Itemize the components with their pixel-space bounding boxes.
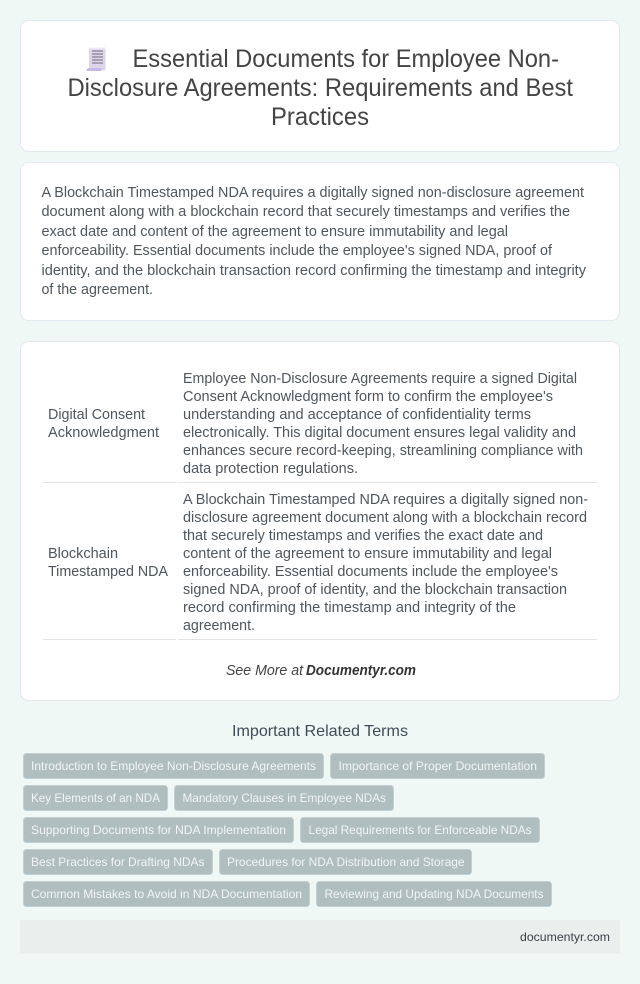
row description: enhances secure record-keeping, streamlining compliance with <box>183 443 583 459</box>
row description: understanding and acceptance of confidentiality terms <box>183 407 531 423</box>
panel: summary paragraph <box>20 162 620 320</box>
row description: electronically. This digital document ensures legal validity and <box>183 425 576 441</box>
chip <box>174 786 394 810</box>
row description <box>183 492 588 634</box>
heading: important related terms: Important Related Terms <box>232 723 408 740</box>
see more link: See More at <box>226 663 304 679</box>
title: Essential Documents for Employee Non- <box>132 45 559 73</box>
text block: summary: A Blockchain Timestamped NDA requires a digitally signed non-disclosure agreement <box>42 185 584 201</box>
chip: Importance of Proper Documentation <box>338 759 537 773</box>
chip: Supporting Documents for NDA Implementation <box>31 823 286 837</box>
chip <box>24 818 294 842</box>
text block: summary: of the agreement. <box>42 282 153 298</box>
row description: data protection regulations. <box>183 461 358 477</box>
text block: summary: exact date and content of the agreement to ensure immutability and legal <box>42 224 508 240</box>
title <box>68 45 573 131</box>
table row: Blockchain Timestamped NDA <box>48 492 588 634</box>
row description: that securely timestamps and verifies the exact date and <box>183 528 543 544</box>
chip: Procedures for NDA Distribution and Storage <box>227 855 465 869</box>
text block: summary: enforceability. Essential documents include the employee's signed NDA, proof of <box>42 243 553 259</box>
footer: documentyr.com <box>520 930 610 944</box>
footer <box>20 920 620 954</box>
panel: related term chips <box>24 754 552 906</box>
row description: enforceability. Essential documents include the employee's <box>183 564 558 580</box>
icon: document scroll <box>86 48 106 71</box>
table row: Digital Consent Acknowledgment <box>48 371 583 477</box>
chip: Mandatory Clauses in Employee NDAs <box>182 791 386 805</box>
panel: title card <box>20 20 620 152</box>
chip <box>24 754 324 778</box>
chip <box>300 818 540 842</box>
row label: Timestamped NDA <box>48 564 168 580</box>
chip: Introduction to Employee Non-Disclosure Agreements <box>31 759 316 773</box>
text block: summary: document along with a blockchain record that securely timestamps and verifies the <box>42 204 570 220</box>
row description: signed NDA, proof of identity, and the blockchain transaction <box>183 582 567 598</box>
row description: agreement. <box>183 618 255 634</box>
row description: content of the agreement to ensure immutability and legal <box>183 546 552 562</box>
row label: Blockchain <box>48 546 118 562</box>
row label <box>48 407 159 441</box>
row description <box>183 371 583 477</box>
chip: Best Practices for Drafting NDAs <box>31 855 204 869</box>
chip <box>24 786 168 810</box>
title: Practices <box>271 103 369 131</box>
title: Disclosure Agreements: Requirements and Best <box>68 74 573 102</box>
chip <box>316 882 552 906</box>
row label <box>48 546 168 580</box>
see more link <box>226 663 416 679</box>
row description: disclosure agreement document along with a blockchain record <box>183 510 587 526</box>
row description: Employee Non-Disclosure Agreements require a signed Digital <box>183 371 577 387</box>
chip: Common Mistakes to Avoid in NDA Documentation <box>31 887 302 901</box>
see more link: Documentyr.com <box>306 663 416 679</box>
chip <box>220 850 472 874</box>
text block: summary <box>42 185 587 298</box>
row label: Digital Consent <box>48 407 145 423</box>
panel: documents table <box>20 342 620 700</box>
chip: Key Elements of an NDA <box>31 791 160 805</box>
row description: record confirming the timestamp and integrity of the <box>183 600 516 616</box>
chip <box>24 882 310 906</box>
row label: Acknowledgment <box>48 425 159 441</box>
chip: Reviewing and Updating NDA Documents <box>324 887 544 901</box>
chip: Legal Requirements for Enforceable NDAs <box>308 823 532 837</box>
text block: summary: identity, and the blockchain transaction record confirming the timestamp and integrity <box>42 263 587 279</box>
chip <box>24 850 212 874</box>
row description: Consent Acknowledgment form to confirm the employee's <box>183 389 553 405</box>
chip <box>330 754 544 778</box>
row description: A Blockchain Timestamped NDA requires a digitally signed non- <box>183 492 588 508</box>
